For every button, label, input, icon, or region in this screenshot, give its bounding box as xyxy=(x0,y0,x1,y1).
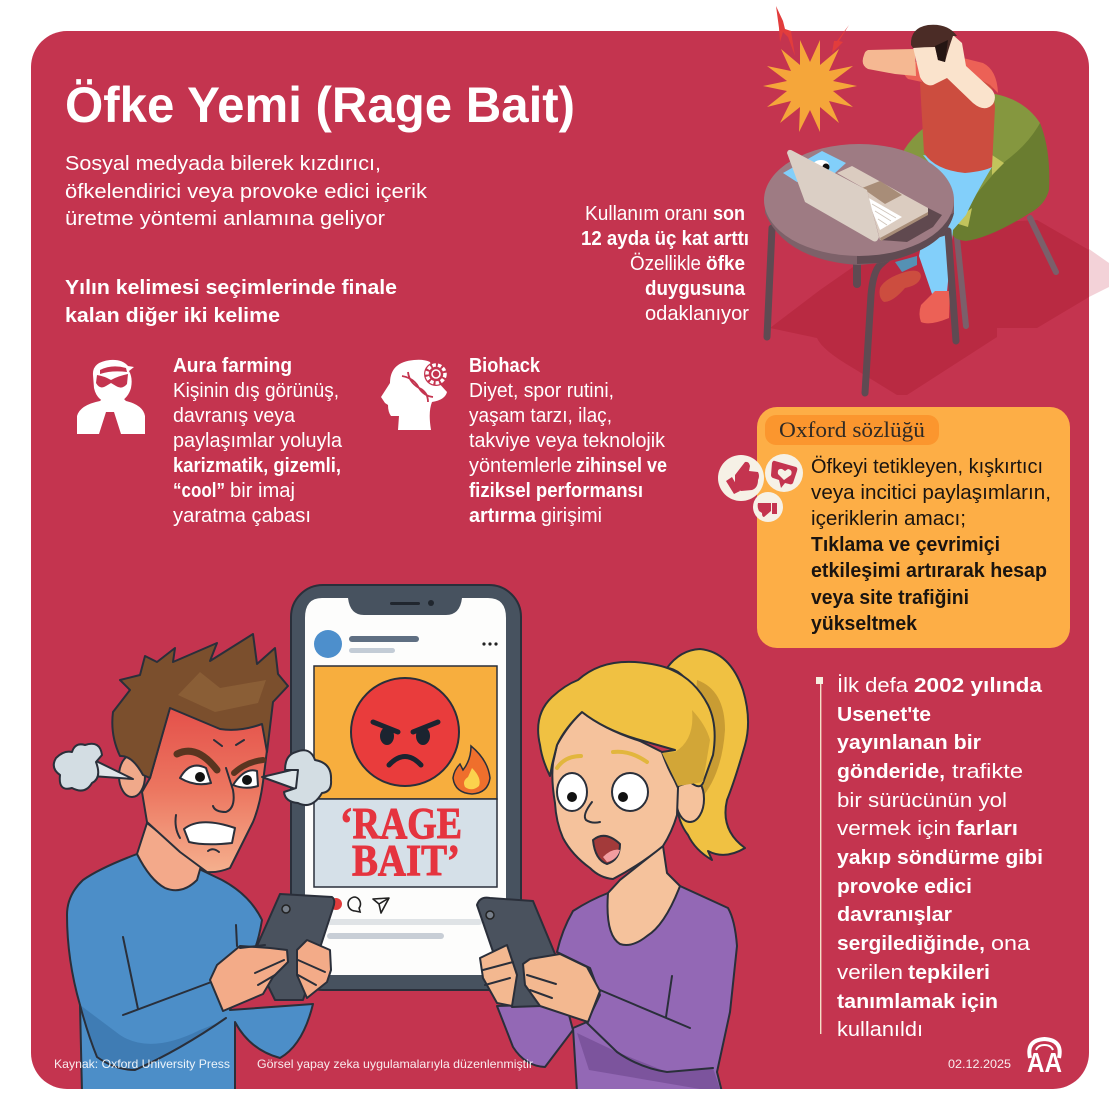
text block: Biohack: Diyet, spor rutini, xyxy=(469,380,614,402)
nose and creases xyxy=(213,740,244,812)
ponytail xyxy=(667,649,748,860)
teeth xyxy=(184,822,235,844)
right hand xyxy=(297,940,331,998)
content lines xyxy=(327,919,482,925)
footer: AI note: Görsel yapay zeka uygulamalarıyla düzenlenmiştir xyxy=(257,1057,533,1071)
text block: origin of the term: İlk defa xyxy=(837,674,909,697)
hair front xyxy=(538,662,715,786)
illustration: shocked woman xyxy=(477,649,748,1092)
icon: red lightning bolts xyxy=(776,6,849,56)
text block: origin of the term: provoke edici xyxy=(837,876,972,898)
text block: Aura farming: davranış veya xyxy=(173,405,296,427)
tag: Oxford sözlüğü xyxy=(765,415,939,445)
man figure xyxy=(863,25,998,323)
eyes and brows xyxy=(557,752,648,811)
hair xyxy=(112,634,288,778)
icon: biohack head with DNA and gear xyxy=(381,360,448,430)
caption block xyxy=(314,799,497,887)
arm raised xyxy=(863,49,916,76)
timeline marker xyxy=(816,677,823,1034)
text block: Aura farming xyxy=(173,355,343,527)
text block: origin of the term: gönderide, xyxy=(837,761,945,783)
panel: Oxford dictionary xyxy=(757,407,1070,648)
text block: definition: üretme yöntemi anlamına geliyor xyxy=(65,208,385,230)
text block: Aura farming: Kişinin dış görünüş, xyxy=(173,380,339,402)
text block: origin of the term: Usenet'te xyxy=(837,704,931,726)
icon: thumbs up xyxy=(718,455,764,501)
RAGE BAIT headline: BAIT’ xyxy=(352,836,460,885)
neck and chest xyxy=(608,846,680,945)
text block: origin of the term: tanımlamak için xyxy=(837,991,998,1013)
text block: Biohack: Biohack xyxy=(469,355,541,377)
text block: origin of the term: tepkileri xyxy=(908,962,990,984)
icon: explosion burst xyxy=(763,40,857,132)
text: definition body: etkileşimi artırarak hesap xyxy=(811,560,1047,582)
shirt xyxy=(557,886,737,1092)
text: definition body: Tıklama ve çevrimiçi xyxy=(811,534,1000,556)
text block: Biohack: zihinsel ve xyxy=(576,455,667,477)
icon: aura farming person xyxy=(77,360,145,434)
text block: Aura farming: karizmatik, gizemli, xyxy=(173,455,341,477)
RAGE BAIT headline: ‘RAGE xyxy=(340,799,462,848)
text block: usage rate xyxy=(581,203,749,325)
text block: origin of the term: trafikte xyxy=(952,761,1023,783)
laptop xyxy=(783,150,942,242)
text block: Biohack: yöntemlerle xyxy=(469,455,572,477)
text: definition body: yükseltmek xyxy=(811,613,918,635)
icon: thumbs down xyxy=(753,492,783,522)
text block: origin of the term: bir sürücünün yol xyxy=(837,790,1007,812)
footer: date: 02.12.2025 xyxy=(948,1057,1011,1071)
ear xyxy=(678,784,705,823)
icons: social reactions xyxy=(718,454,803,522)
text: definition body: veya incitici paylaşımların, xyxy=(811,482,1051,504)
text block: Aura farming: Aura farming xyxy=(173,355,292,377)
text block: origin of the term: 2002 yılında xyxy=(914,675,1043,697)
logo: AA: AA xyxy=(1027,1047,1062,1078)
icon: heart bubble xyxy=(765,454,803,492)
text block: origin of the term: vermek için xyxy=(837,818,951,840)
text block: Aura farming: “cool” xyxy=(173,480,225,502)
floor shadow xyxy=(770,220,1089,395)
footer: source: Kaynak: Oxford University Press xyxy=(54,1057,230,1071)
table xyxy=(764,144,956,393)
text block: Aura farming: yaratma çabası xyxy=(173,505,311,527)
text block: usage rate: Kullanım oranı xyxy=(585,203,708,225)
heading: word of the year finalists: Yılın kelimesi seçimlerinde finale xyxy=(65,277,397,299)
text: definition body xyxy=(811,456,1051,635)
right hand xyxy=(523,954,600,1022)
mouth xyxy=(593,836,620,864)
text block: origin of the term: farları xyxy=(956,818,1018,840)
phone screen xyxy=(305,598,506,975)
text block: origin of the term xyxy=(837,674,1043,1041)
shirt shadows and folds xyxy=(82,1006,215,1069)
brows and eyes xyxy=(177,751,263,788)
sleeves xyxy=(902,62,922,82)
phone body xyxy=(291,585,521,990)
heading: word of the year finalists xyxy=(65,277,397,327)
text block: origin of the term: yakıp söndürme gibi xyxy=(837,847,1043,869)
text block: Biohack: girişimi xyxy=(541,505,602,527)
text block: usage rate: öfke xyxy=(706,253,745,275)
text block: Biohack: artırma xyxy=(469,505,537,527)
nose xyxy=(585,802,600,823)
steam left xyxy=(54,744,133,791)
text block: origin of the term: davranışlar xyxy=(837,904,952,926)
post header xyxy=(314,630,498,658)
text block: origin of the term: yayınlanan bir xyxy=(837,732,981,754)
text block: Aura farming: paylaşımlar yoluyla xyxy=(173,430,343,452)
post image background xyxy=(314,666,497,799)
text block: definition: Sosyal medyada bilerek kızdırıcı, xyxy=(65,153,381,175)
shirt xyxy=(67,854,313,1092)
text block: origin of the term: ona xyxy=(991,933,1031,955)
text block: Biohack: fiziksel performansı xyxy=(469,480,643,502)
left hand xyxy=(480,945,517,1006)
illustration: big phone with rage bait post xyxy=(291,585,521,990)
text: definition body: içeriklerin amacı; xyxy=(811,508,966,530)
torso xyxy=(920,60,995,173)
green armchair xyxy=(900,94,1049,241)
face xyxy=(552,712,678,879)
text: definition body: veya site trafiğini xyxy=(811,587,969,609)
text block: origin of the term: kullanıldı xyxy=(837,1019,923,1041)
left hand xyxy=(210,945,288,1011)
text block: usage rate: Özellikle xyxy=(630,253,701,275)
chair legs xyxy=(957,218,1056,326)
text block: usage rate: son xyxy=(713,203,745,225)
text block: definition xyxy=(65,153,428,230)
neck xyxy=(137,823,201,890)
hair xyxy=(911,25,957,62)
hair tie xyxy=(668,667,684,676)
illustration: frustrated man at laptop xyxy=(763,6,1089,395)
face xyxy=(142,707,267,872)
woman phone xyxy=(477,898,560,1007)
back leg and shoe xyxy=(895,256,917,272)
text block: usage rate: duygusuna xyxy=(645,278,746,300)
text: definition body: Öfkeyi tetikleyen, kışkırtıcı xyxy=(811,456,1043,478)
illustration: angry man xyxy=(54,634,334,1092)
steam right xyxy=(262,750,331,805)
trousers xyxy=(919,155,992,294)
icon: angry emoji xyxy=(351,678,459,786)
man phone xyxy=(253,894,334,1000)
text block: definition: öfkelendirici veya provoke edici içerik xyxy=(65,181,428,203)
text block: usage rate: odaklanıyor xyxy=(645,303,749,325)
speaker xyxy=(390,602,420,605)
text block: usage rate: 12 ayda üç kat arttı xyxy=(581,228,749,250)
text block: origin of the term: sergilediğinde, xyxy=(837,933,985,955)
text block: origin of the term: verilen xyxy=(837,962,903,984)
heading: word of the year finalists: kalan diğer iki kelime xyxy=(65,305,280,327)
decorative shadow outside the panel xyxy=(1089,249,1109,297)
text block: Biohack xyxy=(469,355,667,527)
head and hands xyxy=(913,35,995,108)
title: Öfke Yemi (Rage Bait) xyxy=(65,77,575,133)
post actions xyxy=(330,897,389,913)
icon: flame xyxy=(453,746,490,794)
front shoe xyxy=(920,291,950,323)
text block: Biohack: takviye veya teknolojik xyxy=(469,430,666,452)
text block: Aura farming: bir imaj xyxy=(230,480,295,502)
RAGE BAIT headline xyxy=(340,799,462,885)
tag: Oxford sözlüğü: Oxford sözlüğü xyxy=(779,417,925,442)
ear xyxy=(119,755,145,797)
text block: Biohack: yaşam tarzı, ilaç, xyxy=(469,405,612,427)
